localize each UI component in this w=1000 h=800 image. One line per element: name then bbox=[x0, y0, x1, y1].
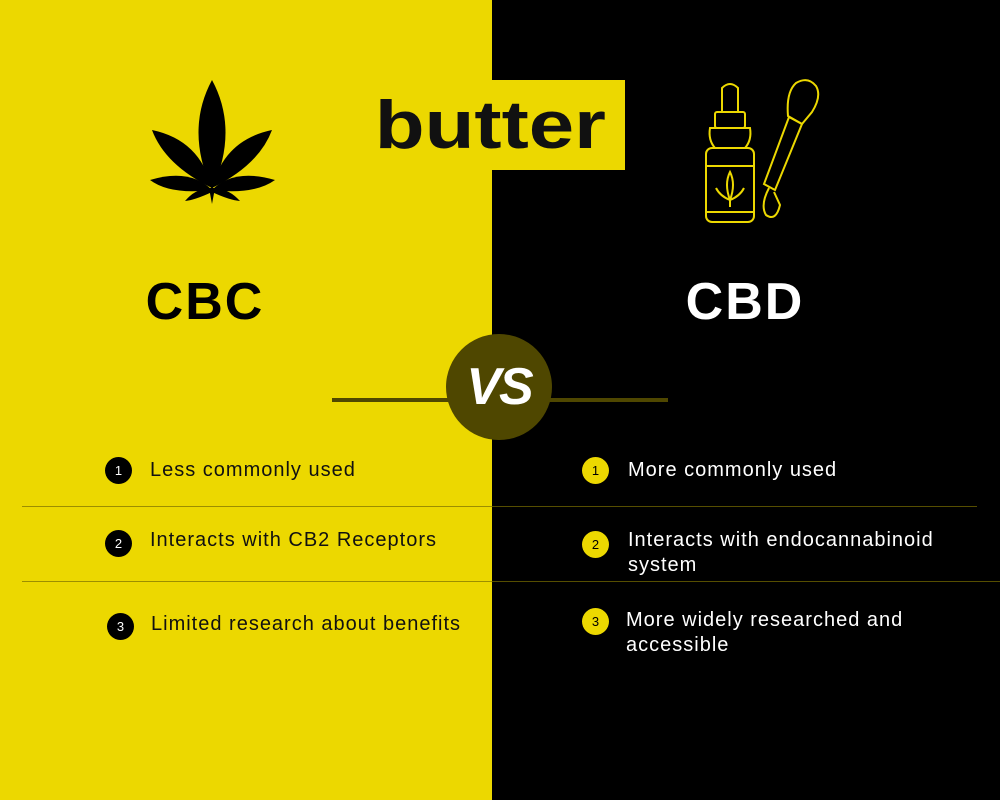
list: CBD: 2 bbox=[592, 537, 599, 552]
list: CBD: More widely researched and bbox=[626, 609, 903, 631]
icon: oil bottle and dropper bbox=[705, 79, 820, 223]
heading: CBD: CBD bbox=[686, 273, 804, 331]
list: CBC bbox=[105, 457, 461, 640]
divider line right bbox=[540, 398, 668, 402]
divider line left bbox=[332, 398, 462, 402]
list: CBD: 3 bbox=[592, 614, 599, 629]
list: CBC: Limited research about benefits bbox=[151, 613, 461, 635]
list: CBD: More commonly used bbox=[628, 459, 837, 481]
badge: VS: VS bbox=[466, 358, 532, 416]
list: CBD: 1 bbox=[592, 463, 599, 478]
heading: CBC: CBC bbox=[146, 273, 264, 331]
list: CBD: system bbox=[628, 554, 697, 576]
list: CBC: 1 bbox=[115, 463, 122, 478]
row separators bbox=[22, 506, 977, 507]
list: CBC: 3 bbox=[117, 619, 124, 634]
list: CBD bbox=[582, 457, 934, 656]
logo: butter: butter bbox=[375, 87, 606, 163]
list: CBD: accessible bbox=[626, 634, 729, 656]
list: CBD: Interacts with endocannabinoid bbox=[628, 529, 934, 551]
list: CBC: Interacts with CB2 Receptors bbox=[150, 529, 437, 551]
panel: right black bbox=[492, 0, 1000, 800]
badge: VS bbox=[446, 334, 552, 440]
panel: left yellow bbox=[0, 0, 492, 800]
list: CBC: Less commonly used bbox=[150, 459, 356, 481]
list: CBC: 2 bbox=[115, 536, 122, 551]
icon: cannabis leaf bbox=[150, 80, 275, 204]
